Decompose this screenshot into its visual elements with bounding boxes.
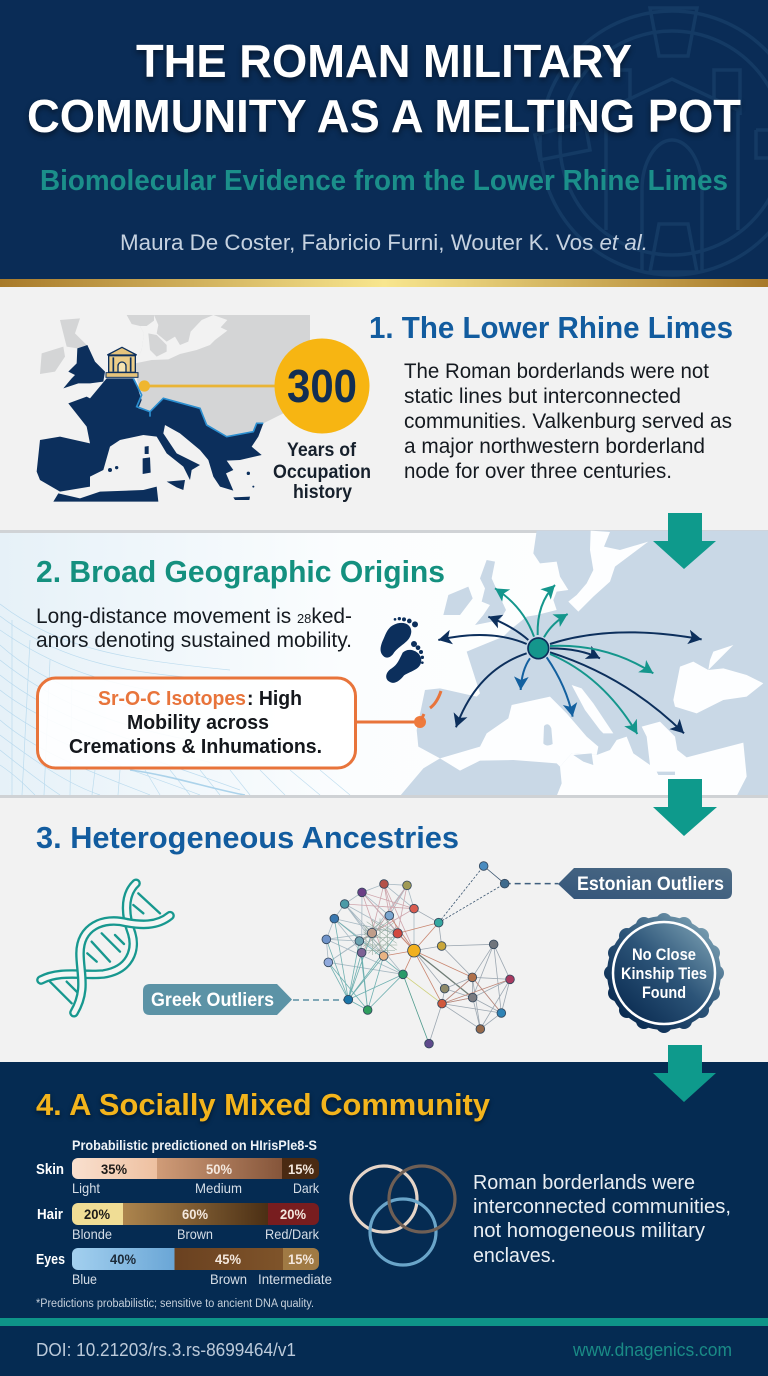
bar chart: eyes: 45% <box>215 1251 242 1267</box>
icon: footprints <box>381 617 424 683</box>
bar chart: hair: Red/Dark <box>265 1226 320 1242</box>
body text 2: Long-distance movement is 28ked- <box>36 605 352 628</box>
marker line to circle <box>144 382 287 390</box>
body text 1: a major northwestern borderland <box>404 435 705 458</box>
panel: section 2 geographic origins <box>0 530 768 796</box>
callout: isotopes: : High <box>247 688 302 710</box>
bar chart: skin: 35% <box>101 1161 128 1177</box>
conclusion text: interconnected communities, <box>473 1196 731 1218</box>
body text 1: communities. Valkenburg served as <box>404 410 732 433</box>
tag: greek outliers <box>143 984 349 1015</box>
icon: dna helix <box>41 883 170 1013</box>
title: COMMUNITY AS A MELTING POT <box>27 90 741 142</box>
bar chart: eyes: 40% <box>110 1251 137 1267</box>
bar chart: eyes: Intermediate <box>258 1271 332 1287</box>
body text 2: anors denoting sustained mobility. <box>36 629 352 652</box>
bar chart: eyes <box>36 1248 332 1287</box>
body text 1 <box>404 360 732 483</box>
bar chart: hair: 20% <box>280 1206 307 1222</box>
footer <box>0 1318 768 1376</box>
panel: section 3 ancestries <box>0 795 768 1062</box>
network graph <box>322 862 558 1048</box>
tag: estonian outliers <box>558 868 732 899</box>
doi: DOI: 10.21203/rs.3.rs-8699464/v1 <box>36 1340 296 1360</box>
panel: section 1 lower rhine limes <box>0 287 768 530</box>
stat circle: 300: 300 <box>287 360 357 412</box>
conclusion text <box>473 1172 731 1267</box>
heading 2: 2. Broad Geographic Origins <box>36 554 445 589</box>
bar chart: eyes: Brown <box>210 1271 247 1287</box>
stat label: Occupation <box>273 462 371 483</box>
callout: isotopes: Mobility across <box>127 712 269 734</box>
bar chart: hair: Brown <box>177 1226 213 1242</box>
conclusion text: enclaves. <box>473 1245 556 1267</box>
bar chart: skin: Light <box>72 1180 100 1196</box>
bar chart: hair: 20% <box>84 1206 111 1222</box>
bar chart: eyes: Eyes <box>36 1251 65 1268</box>
arrow: section 1 to 2 <box>653 513 716 569</box>
chart title: Probabilistic predictioned on HIrisPle8-S <box>72 1137 317 1153</box>
callout: isotopes <box>38 678 441 768</box>
heading 1: 1. The Lower Rhine Limes <box>369 310 733 345</box>
bar chart: skin: 15% <box>288 1161 315 1177</box>
bar chart: eyes: 15% <box>288 1251 315 1267</box>
gold divider <box>0 279 768 287</box>
badge: no close kinship: No Close <box>632 945 696 964</box>
body text 1: node for over three centuries. <box>404 460 672 483</box>
stat label: Years of <box>287 440 357 461</box>
callout: isotopes: Sr-O-C Isotopes <box>98 688 246 710</box>
body text 1: static lines but interconnected <box>404 385 681 408</box>
bar chart: hair: 60% <box>182 1206 209 1222</box>
badge: no close kinship: Found <box>642 983 686 1002</box>
origin node <box>528 638 549 659</box>
arrows: migration <box>438 585 702 734</box>
bar chart: skin: Medium <box>195 1180 242 1196</box>
tag: estonian outliers: Estonian Outliers <box>577 874 724 895</box>
icon: temple <box>106 347 138 377</box>
icon: fort watermark <box>535 8 768 275</box>
footnote: *Predictions probabilistic; sensitive to ancient DNA quality. <box>36 1298 314 1310</box>
conclusion text: Roman borderlands were <box>473 1172 695 1194</box>
tag: greek outliers: Greek Outliers <box>151 990 274 1011</box>
map: roman frontier europe <box>37 315 310 502</box>
callout: isotopes: Cremations & Inhumations. <box>69 736 322 758</box>
panel: header <box>0 0 768 279</box>
panel: section 4 socially mixed <box>0 1062 768 1318</box>
bar chart: skin <box>36 1158 320 1196</box>
bar chart: skin: Dark <box>293 1180 320 1196</box>
bar chart: hair <box>37 1203 320 1242</box>
title <box>27 35 741 142</box>
bar chart: skin: 50% <box>206 1161 233 1177</box>
bar chart: hair: Hair <box>37 1206 63 1223</box>
arrow: section 3 to 4 <box>653 1045 716 1102</box>
badge: no close kinship <box>604 913 724 1033</box>
heading 4: 4. A Socially Mixed Community <box>36 1087 491 1122</box>
bar chart: eyes: Blue <box>72 1271 97 1287</box>
bar chart: hair: Blonde <box>72 1226 112 1242</box>
title: THE ROMAN MILITARY <box>136 35 632 87</box>
conclusion text: not homogeneous military <box>473 1220 705 1242</box>
arrow: section 2 to 3 <box>653 779 717 836</box>
stat label <box>273 440 371 503</box>
icon: venn circles <box>351 1166 455 1265</box>
decorative mesh <box>0 604 350 795</box>
body text 1: The Roman borderlands were not <box>404 360 709 383</box>
body text 2 <box>36 605 352 652</box>
bar chart: skin: Skin <box>36 1161 64 1178</box>
badge: no close kinship: Kinship Ties <box>621 964 707 983</box>
stat label: history <box>293 482 352 503</box>
heading 3: 3. Heterogeneous Ancestries <box>36 820 459 855</box>
map: europe light <box>381 531 768 796</box>
website: www.dnagenics.com <box>572 1340 732 1360</box>
subtitle: Biomolecular Evidence from the Lower Rhine Limes <box>40 165 728 197</box>
stat circle: 300 <box>274 338 370 434</box>
authors: Maura De Coster, Fabricio Furni, Wouter K. Vos et al. <box>120 230 648 255</box>
